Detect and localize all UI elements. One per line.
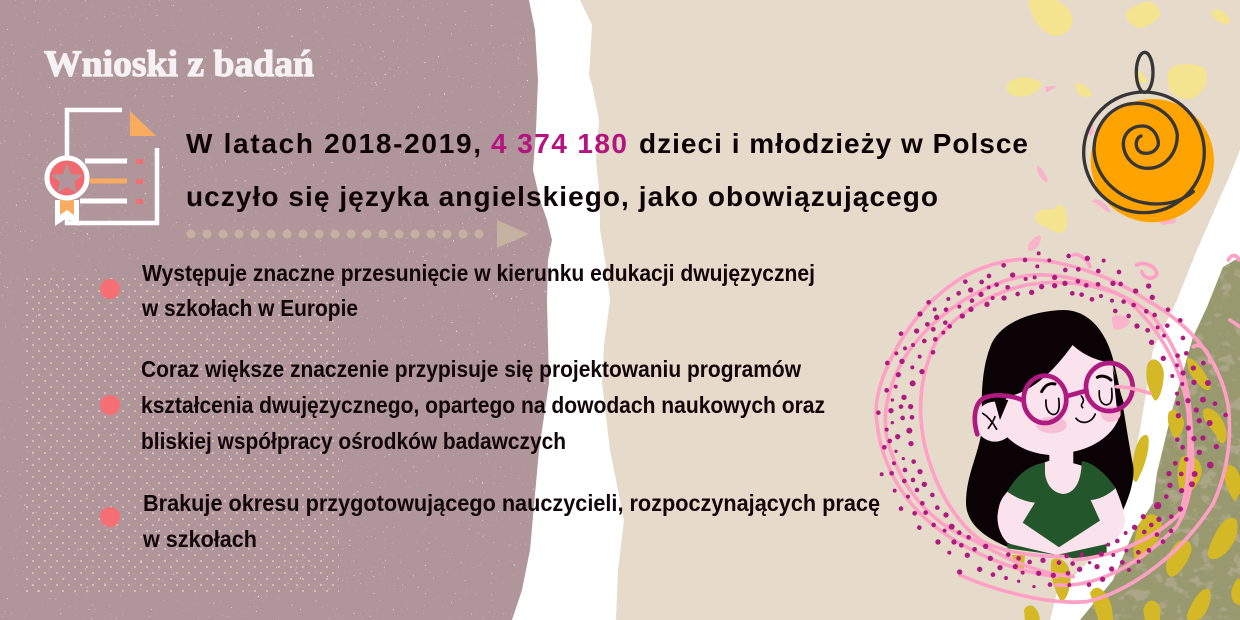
arrow: dotted [186,220,529,248]
heading text [186,128,1028,212]
eyes and mouth [983,376,1112,429]
olive area yellow spots [1012,358,1240,620]
icon: certificate document [47,110,157,226]
bullet 1 [100,260,815,321]
illustration: girl with glasses [966,310,1134,558]
bullet 2: bliskiej współpracy ośrodków badawczych [141,428,566,454]
title: Wnioski z badań [44,44,314,85]
panel: olive torn paper [1080,257,1240,620]
skin: arms and neck [997,450,1125,556]
hair [966,310,1134,547]
bullet 3: Brakuje okresu przygotowującego nauczycieli, rozpoczynających pracę [143,490,880,516]
bullet 3 [100,490,880,552]
heading text: dzieci i młodzieży w Polsce [639,128,1028,159]
panel: beige torn paper [580,0,1240,620]
cheeks [1036,417,1067,433]
bullet 1: w szkołach w Europie [141,295,358,321]
magenta dots [876,251,1228,588]
pink scribble circles [876,254,1240,602]
icon: orange spiral ornament [1084,52,1214,222]
face [1002,345,1121,455]
bullet 2: Coraz większe znaczenie przypisuje się projektowaniu programów [141,356,801,382]
bullet 3: w szkołach [142,526,257,552]
glasses [975,363,1133,434]
heading text: W latach 2018-2019, [186,128,481,159]
heading text: uczyło się języka angielskiego, jako obowiązującego [186,181,938,212]
bullet 2: kształcenia dwujęzycznego, opartego na dowodach naukowych oraz [141,392,825,418]
bullet 1: Występuje znaczne przesunięcie w kierunku edukacji dwujęzycznej [142,260,815,286]
panel: mauve torn paper [0,0,552,620]
ear [975,402,1015,442]
hair strand over face [994,398,1008,420]
bullet 2 [100,356,825,454]
heading text: 4 374 180 [491,128,627,159]
dotted texture [25,278,339,594]
grunge speckles [0,0,560,620]
decorative yellow and pink blobs, top right [1007,0,1230,251]
shirt [1007,461,1116,547]
pink blots [1028,241,1130,330]
